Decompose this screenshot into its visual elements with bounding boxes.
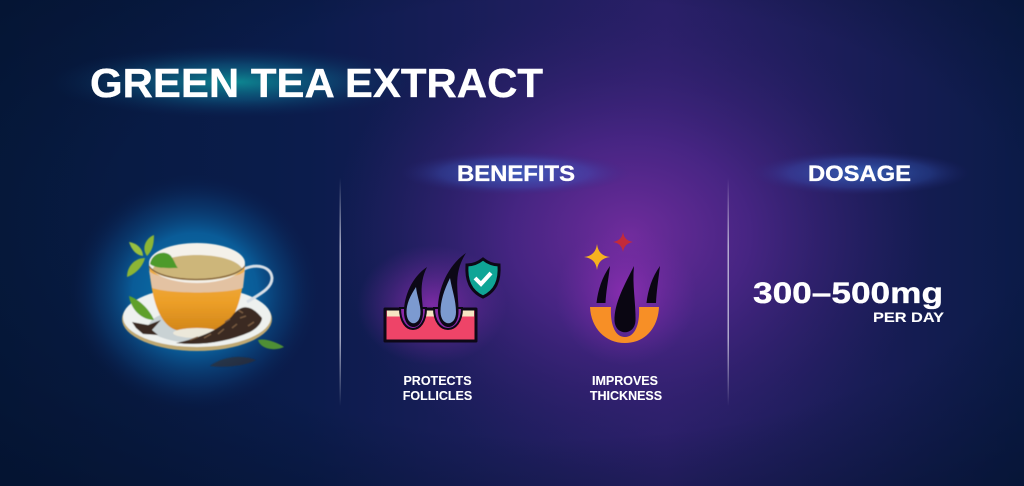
tea leaves speckle xyxy=(190,310,254,340)
follicles xyxy=(400,253,466,329)
label: protects follicles: PROTECTS xyxy=(403,374,472,388)
cup handle xyxy=(244,266,272,302)
icon: protected hair follicles xyxy=(357,245,507,365)
tea leaves pile xyxy=(132,307,262,367)
shield xyxy=(467,259,499,297)
cup and tea xyxy=(149,243,245,338)
title xyxy=(50,46,543,118)
heading: dosage: DOSAGE xyxy=(808,161,911,186)
scalp xyxy=(590,307,659,343)
heading: benefits xyxy=(400,151,630,195)
sparkles xyxy=(584,232,633,270)
dosage value xyxy=(753,277,945,325)
saucer xyxy=(122,287,272,351)
label: improves thickness: THICKNESS xyxy=(590,389,662,403)
dosage value: PER DAY xyxy=(873,309,945,325)
dosage value: 300–500mg xyxy=(753,277,943,310)
label: improves thickness xyxy=(590,374,662,403)
label: improves thickness: IMPROVES xyxy=(592,374,658,388)
hairs xyxy=(596,266,660,332)
title: GREEN TEA EXTRACT xyxy=(90,60,543,106)
green leaves xyxy=(127,235,284,349)
icon: improved hair thickness xyxy=(556,225,696,365)
heading: benefits: BENEFITS xyxy=(457,161,575,186)
label: protects follicles: FOLLICLES xyxy=(403,389,472,403)
skin xyxy=(385,309,476,341)
heading: dosage xyxy=(750,151,970,195)
divider xyxy=(340,178,341,406)
illustration: cup of green tea on saucer xyxy=(70,174,320,410)
label: protects follicles xyxy=(403,374,472,403)
divider xyxy=(728,178,729,406)
